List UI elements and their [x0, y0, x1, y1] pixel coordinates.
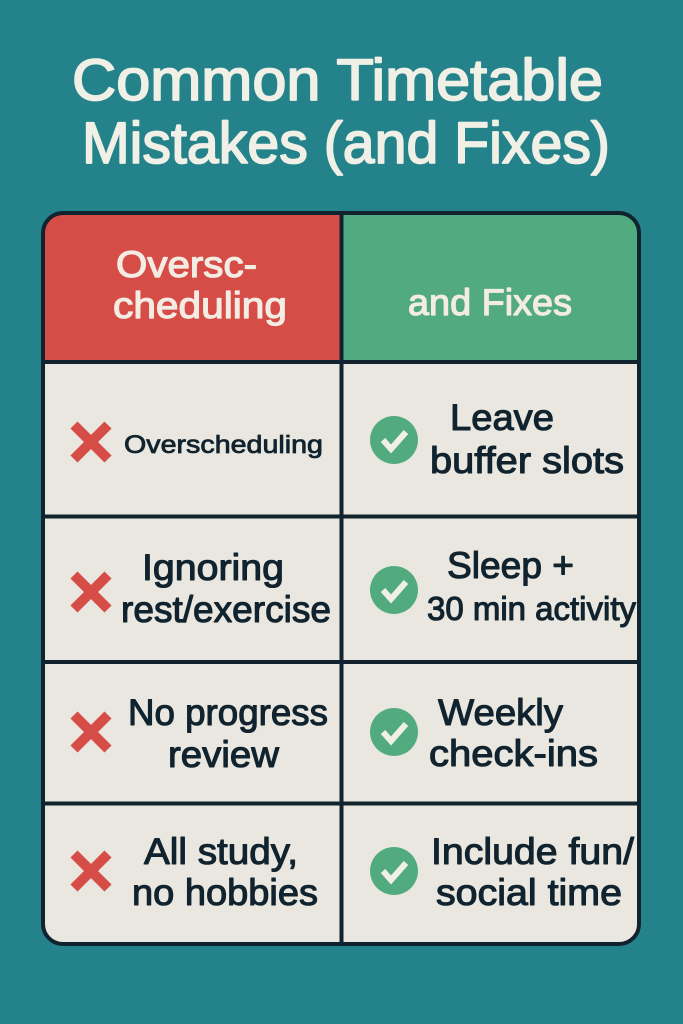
row 3 fix: Weekly: [438, 692, 564, 733]
row 4 fix: social time: [436, 872, 622, 913]
icon: red cross: [74, 425, 108, 459]
row 4 mistake: no hobbies: [132, 872, 318, 913]
row 2 fix: [370, 545, 636, 627]
row 3 fix: check-ins: [429, 733, 598, 774]
icon: red cross: [74, 575, 108, 609]
row 4 fix: Include fun/: [431, 831, 635, 872]
row 4 mistake: [74, 831, 318, 913]
title: [72, 48, 610, 176]
row 4 mistake: All study,: [144, 831, 298, 872]
header cell: mistakes: cheduling: [113, 285, 287, 326]
row 3 mistake: review: [168, 734, 279, 775]
row 1 mistake: [74, 425, 323, 459]
row 2 fix: 30 min activity: [427, 590, 636, 627]
icon: red cross: [74, 854, 108, 888]
row 1 fix: Leave: [450, 397, 554, 438]
header cell: fixes: and Fixes: [408, 282, 572, 323]
header cell: mistakes: [43, 213, 342, 362]
row 3 mistake: [74, 692, 328, 775]
row 2 mistake: rest/exercise: [121, 589, 331, 630]
icon: red cross: [74, 715, 108, 749]
row 2 fix: Sleep +: [447, 545, 574, 586]
icon: green check: [370, 566, 418, 614]
title: Common Timetable: [72, 48, 603, 113]
row 1 fix: [370, 397, 624, 481]
row 2 mistake: Ignoring: [142, 547, 284, 588]
table grid lines: [43, 213, 639, 944]
title: Mistakes (and Fixes): [82, 111, 610, 176]
row 1 fix: buffer slots: [430, 440, 624, 481]
row 4 fix: [370, 831, 635, 913]
row 1 mistake: Overscheduling: [124, 431, 323, 459]
header cell: mistakes: Oversc-: [116, 244, 257, 285]
header cell: fixes: [342, 213, 639, 362]
icon: green check: [370, 416, 418, 464]
row 2 mistake: [74, 547, 331, 630]
row 3 mistake: No progress: [128, 692, 328, 733]
icon: green check: [370, 847, 418, 895]
panel: comparison table: [43, 213, 639, 944]
row 3 fix: [370, 692, 598, 774]
icon: green check: [370, 708, 418, 756]
